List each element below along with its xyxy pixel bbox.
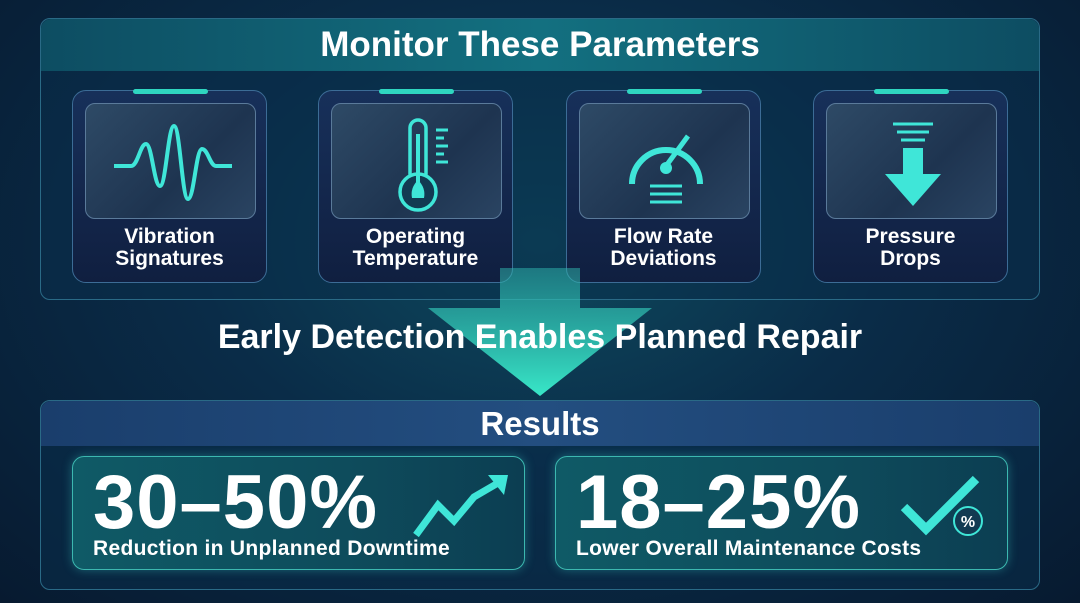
label: Flow Rate — [614, 225, 713, 248]
number: 18–25% — [576, 460, 861, 545]
label: Vibration — [124, 225, 215, 248]
caption: Lower Overall Maintenance Costs — [576, 537, 921, 560]
heading: results — [41, 401, 1039, 446]
label: Deviations — [610, 247, 717, 270]
icon: gauge — [629, 134, 703, 204]
result card: costs — [555, 456, 1008, 570]
card: pressure drops — [813, 90, 1008, 283]
icon: wave — [114, 124, 232, 201]
icon: thermometer — [398, 118, 448, 212]
heading: monitor these parameters: Monitor These Parameters — [320, 25, 760, 64]
label: Drops — [880, 247, 941, 270]
heading: results: Results — [480, 405, 600, 442]
label: Operating — [366, 225, 465, 248]
heading: monitor these parameters — [41, 19, 1039, 71]
label — [866, 225, 955, 270]
panel: monitor parameters — [40, 18, 1040, 300]
icon: down arrow — [885, 122, 941, 206]
label: Pressure — [866, 225, 955, 248]
card: vibration signatures — [72, 90, 267, 283]
label: Signatures — [115, 247, 224, 270]
icon: check percent — [900, 476, 983, 536]
heading: early detection: Early Detection Enables Planned Repair — [218, 318, 862, 356]
icon: trend arrow — [413, 475, 508, 538]
label — [352, 225, 478, 270]
caption: Reduction in Unplanned Downtime — [93, 537, 450, 560]
result card: downtime — [72, 456, 525, 570]
card: flow rate deviations — [566, 90, 761, 283]
arrow: down flow — [428, 268, 652, 396]
number: 30–50% — [93, 460, 378, 545]
label: Temperature — [353, 247, 478, 270]
card: operating temperature — [318, 90, 513, 283]
label — [115, 225, 224, 270]
icon: check percent: % — [961, 514, 975, 531]
panel: results — [40, 400, 1040, 590]
label — [610, 225, 717, 270]
